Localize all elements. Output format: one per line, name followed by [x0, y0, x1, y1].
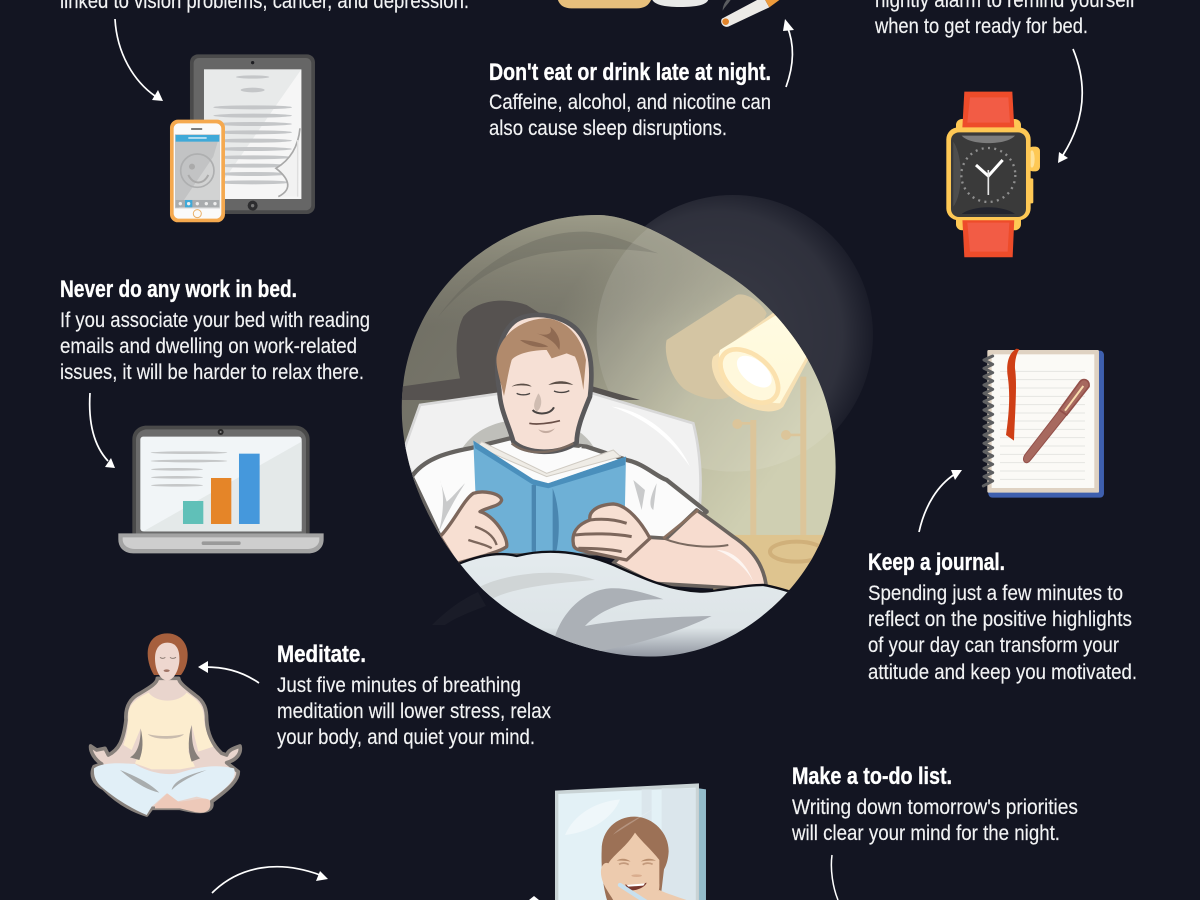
arrow: to tablet — [115, 19, 163, 101]
arrow: to laptop — [90, 393, 115, 468]
tablet — [190, 54, 315, 214]
icon: meditating woman — [91, 633, 240, 815]
faint bed swooshes outside the scene — [432, 592, 486, 625]
text: never do any work in bed — [60, 276, 370, 384]
arrow: toward mirror — [529, 896, 539, 900]
text: meditate: your body, and quiet your mind. — [277, 726, 535, 749]
text: make a to-do list: Writing down tomorrow's priorities — [792, 796, 1078, 819]
text: don't eat or drink: Caffeine, alcohol, and nicotine can — [489, 91, 771, 114]
phone — [170, 120, 225, 222]
text: don't eat or drink — [489, 59, 771, 140]
lamp — [666, 294, 813, 535]
text: keep a journal: attitude and keep you motivated. — [868, 661, 1137, 684]
text: never do any work in bed: If you associate your bed with reading — [60, 309, 370, 332]
decorative halo behind the central scene — [593, 195, 873, 475]
text: meditate — [277, 641, 551, 749]
icon: laptop — [118, 426, 324, 553]
text: nightly alarm: when to get ready for bed. — [874, 15, 1088, 38]
arrow: to cigarette — [783, 19, 794, 87]
text: meditate: Meditate. — [277, 641, 366, 668]
wall — [400, 210, 840, 537]
text: meditate: Just five minutes of breathing — [277, 674, 521, 697]
icon: mirror with man brushing teeth — [555, 783, 706, 900]
text: make a to-do list: will clear your mind for the night. — [791, 822, 1060, 845]
text: never do any work in bed: issues, it will be harder to relax there. — [60, 361, 364, 384]
blanket — [458, 552, 800, 663]
text: keep a journal — [868, 549, 1137, 684]
text: keep a journal: Spending just a few minutes to — [868, 582, 1123, 605]
floor — [713, 535, 833, 608]
head shadow and headboard — [400, 301, 640, 400]
text: don't eat or drink: also cause sleep disruptions. — [489, 117, 727, 140]
text: don't eat or drink: Don't eat or drink late at night. — [489, 59, 771, 86]
text: never do any work in bed: emails and dwelling on work-related — [60, 335, 357, 358]
text: nightly alarm — [874, 0, 1135, 38]
icon: plate and coffee and cigarette — [557, 0, 782, 27]
text: keep a journal: reflect on the positive highlights — [868, 608, 1132, 631]
text: make a to-do list — [791, 763, 1078, 845]
collar — [579, 446, 582, 448]
text: never do any work in bed: Never do any work in bed. — [60, 276, 297, 303]
right hand — [573, 504, 650, 560]
arrow: to meditator — [198, 661, 259, 683]
book — [473, 441, 626, 553]
icon: notebook with pen — [983, 349, 1104, 498]
torso — [412, 438, 707, 553]
arrow: to notebook — [919, 470, 962, 532]
left hand — [440, 492, 507, 563]
text: make a to-do list: Make a to-do list. — [792, 763, 952, 790]
arrow: from to-do list — [831, 855, 838, 900]
head — [148, 633, 188, 681]
arrow: bottom left — [212, 867, 328, 893]
arrow: to watch — [1058, 49, 1082, 163]
arm — [613, 510, 767, 590]
central illustration: man reading in bed — [402, 215, 836, 656]
icon: tablet and phone — [170, 54, 315, 222]
head and neck — [497, 315, 591, 452]
text: keep a journal: Keep a journal. — [868, 549, 1005, 576]
icon: smart watch — [946, 92, 1040, 257]
text: meditate: meditation will lower stress, relax — [277, 700, 551, 723]
pillow — [405, 392, 701, 503]
text: keep a journal: of your day can transform your — [868, 634, 1119, 657]
